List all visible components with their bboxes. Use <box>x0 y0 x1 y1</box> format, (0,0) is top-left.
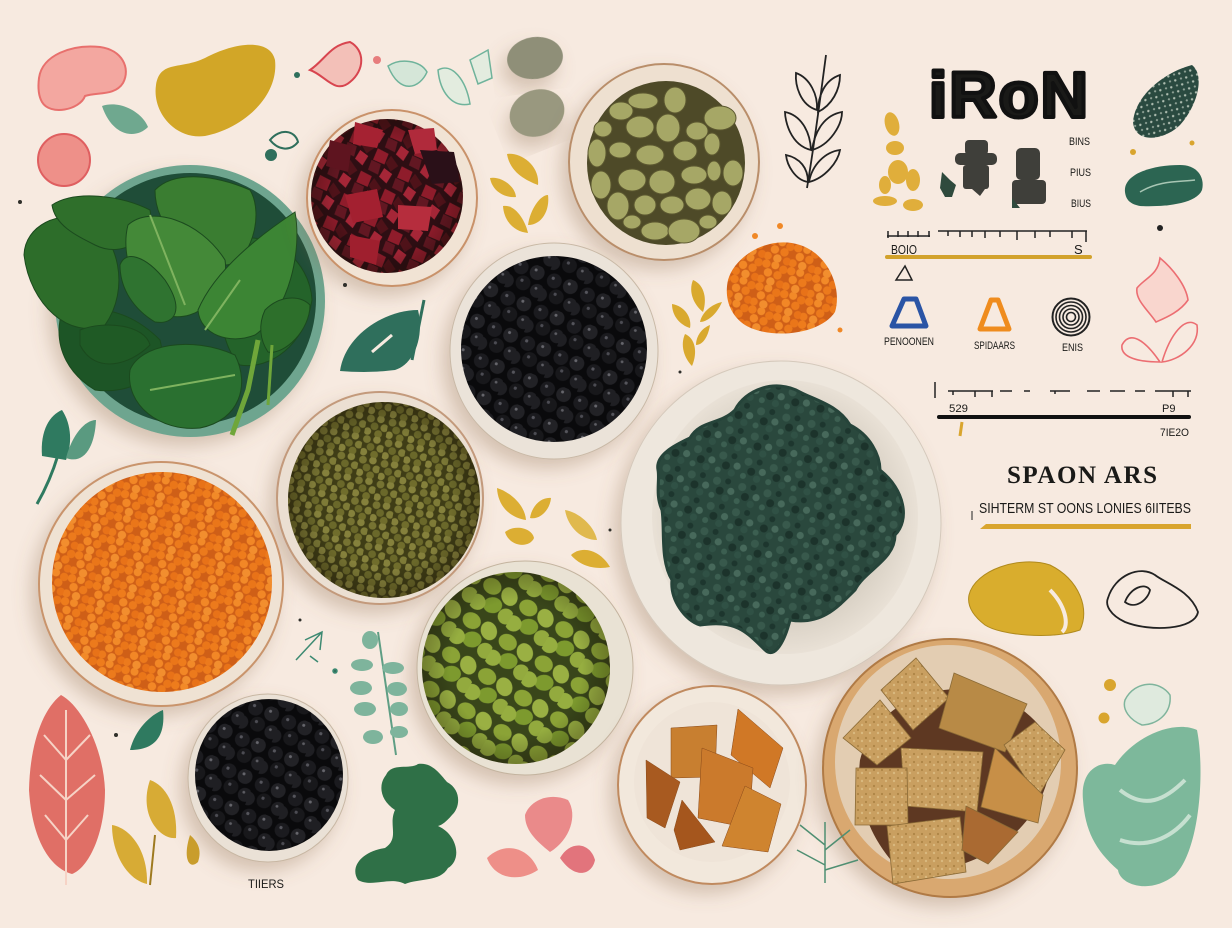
bowl: dried cranberries <box>307 110 477 286</box>
icon: black rings: ENIS <box>1062 342 1083 354</box>
kale leaves <box>658 386 903 653</box>
illustration: mustard blob <box>156 45 275 136</box>
illustration: sage leaf large <box>1083 727 1201 886</box>
labels: supplement list: PIUS <box>1070 167 1091 179</box>
spinach leaves <box>24 177 312 428</box>
illustration: tiny leaves top <box>388 50 492 105</box>
dried cranberry pieces <box>326 122 460 265</box>
bowl: green soybeans <box>417 561 633 775</box>
icon: blue triangle: PENOONEN <box>884 336 934 348</box>
illustration: small sprig near center <box>296 632 337 673</box>
subheading text: SIHTERM ST OONS LONIES 6IITEBS <box>979 500 1191 517</box>
illustration: small teal leaf <box>102 104 148 134</box>
illustration: pink bean <box>38 47 126 110</box>
illustration: green bean shape <box>1125 165 1203 206</box>
illustration: dark green kale <box>355 764 458 884</box>
bowl: orange lentils <box>39 462 283 706</box>
bowl: large tofu <box>823 639 1077 897</box>
stones <box>502 33 572 145</box>
heading: spoon ars: SPAON ARS <box>1007 462 1157 489</box>
illustration: big coral leaf <box>29 695 105 885</box>
illustration: small green sprout <box>266 132 298 160</box>
illustration: pink flower outline <box>1122 258 1197 362</box>
ruler 1: BOIO <box>891 242 917 257</box>
title: IRON: iRoN <box>929 59 1090 131</box>
illustration: small dots right <box>1098 679 1170 725</box>
underline <box>980 524 1191 529</box>
illustration: coral flower top <box>294 42 381 86</box>
illustration: sage fern <box>350 631 408 755</box>
illustration: yellow leaf pair <box>112 780 200 885</box>
bowl: black beans <box>450 243 658 459</box>
illustration: outline bean right <box>1107 571 1198 628</box>
icon: orange triangle <box>974 300 1015 352</box>
lentil pile <box>727 223 842 334</box>
illustration: green small leaf <box>130 710 163 750</box>
bowl: small tofu <box>618 686 806 884</box>
tofu cubes <box>843 658 1065 884</box>
illustration: teal leaf <box>340 300 424 372</box>
edamame beans <box>588 87 743 243</box>
bowl: kale <box>621 361 941 685</box>
illustration: yellow leaves center <box>497 488 610 568</box>
labels: supplement list <box>1069 136 1091 210</box>
label: tiers: TIIERS <box>248 877 284 891</box>
icon: blue triangle <box>884 299 934 348</box>
illustration: line plant <box>785 55 842 188</box>
ruler 2: 7IE2O <box>1160 427 1189 439</box>
illustration: speckled dark leaf <box>1133 65 1199 138</box>
bowl: pale edamame <box>569 64 759 260</box>
icon: dark iron supplements <box>940 140 1046 208</box>
illustration: red circle <box>38 134 90 186</box>
icon: orange triangle: SPIDAARS <box>974 340 1015 352</box>
labels: supplement list: BINS <box>1069 136 1090 148</box>
ruler 2: P9 <box>1162 403 1175 415</box>
ruler 2: 529 <box>949 403 968 415</box>
ruler 1: S <box>1074 242 1083 257</box>
illustration: green sprig bottom <box>797 822 858 883</box>
illustration: yellow sprig <box>672 280 722 366</box>
illustration: teal sprout left <box>37 410 96 504</box>
dots <box>1130 140 1194 231</box>
bowl: small black beans <box>188 694 348 862</box>
illustration: yellow leaves left <box>490 154 548 233</box>
tofu pieces <box>646 709 783 852</box>
illustration: mustard bean right <box>969 562 1084 635</box>
ruler 1 <box>885 231 1092 280</box>
illustration: yellow plant near title <box>873 111 923 211</box>
illustration: pink flower bottom <box>487 797 595 877</box>
labels: supplement list: BIUS <box>1071 198 1091 210</box>
bowl: green lentils <box>277 392 483 604</box>
scattered dots <box>18 200 682 737</box>
icon: black rings <box>1052 298 1090 354</box>
bowl: spinach <box>24 165 325 437</box>
ruler 2 <box>935 382 1191 439</box>
